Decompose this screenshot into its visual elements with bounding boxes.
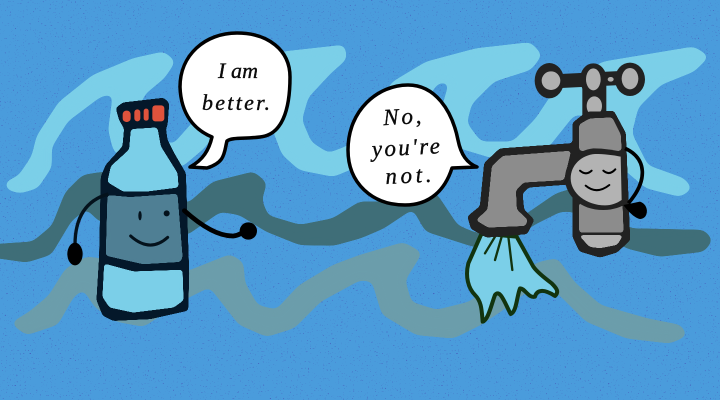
- bottle cap stripes: [123, 105, 164, 122]
- text: I am better: I am: [217, 58, 258, 83]
- water stream: [467, 233, 557, 322]
- faucet handle: [535, 63, 645, 120]
- bottle left arm: [67, 194, 108, 265]
- text: No, you're not.: No,: [382, 103, 422, 130]
- wave: grey teal: [13, 244, 685, 342]
- text: No, you're not.: [368, 102, 442, 190]
- speech bubble: No you're not: [348, 85, 477, 205]
- bottle face: [131, 210, 170, 245]
- faucet arm: [623, 148, 647, 219]
- text: I am better: better.: [202, 90, 270, 115]
- text: No, you're not.: you're: [369, 133, 440, 162]
- bottle character: [67, 99, 257, 320]
- text: No, you're not.: not.: [385, 162, 432, 189]
- faucet face: [565, 148, 627, 210]
- bottle body: [97, 99, 188, 320]
- wave: light blue: [7, 44, 707, 195]
- wave: dark teal: [0, 173, 711, 261]
- faucet character: [468, 63, 647, 257]
- bottle right arm: [184, 211, 257, 240]
- faucet body: [468, 112, 629, 257]
- speech bubble: I am better: [180, 33, 290, 168]
